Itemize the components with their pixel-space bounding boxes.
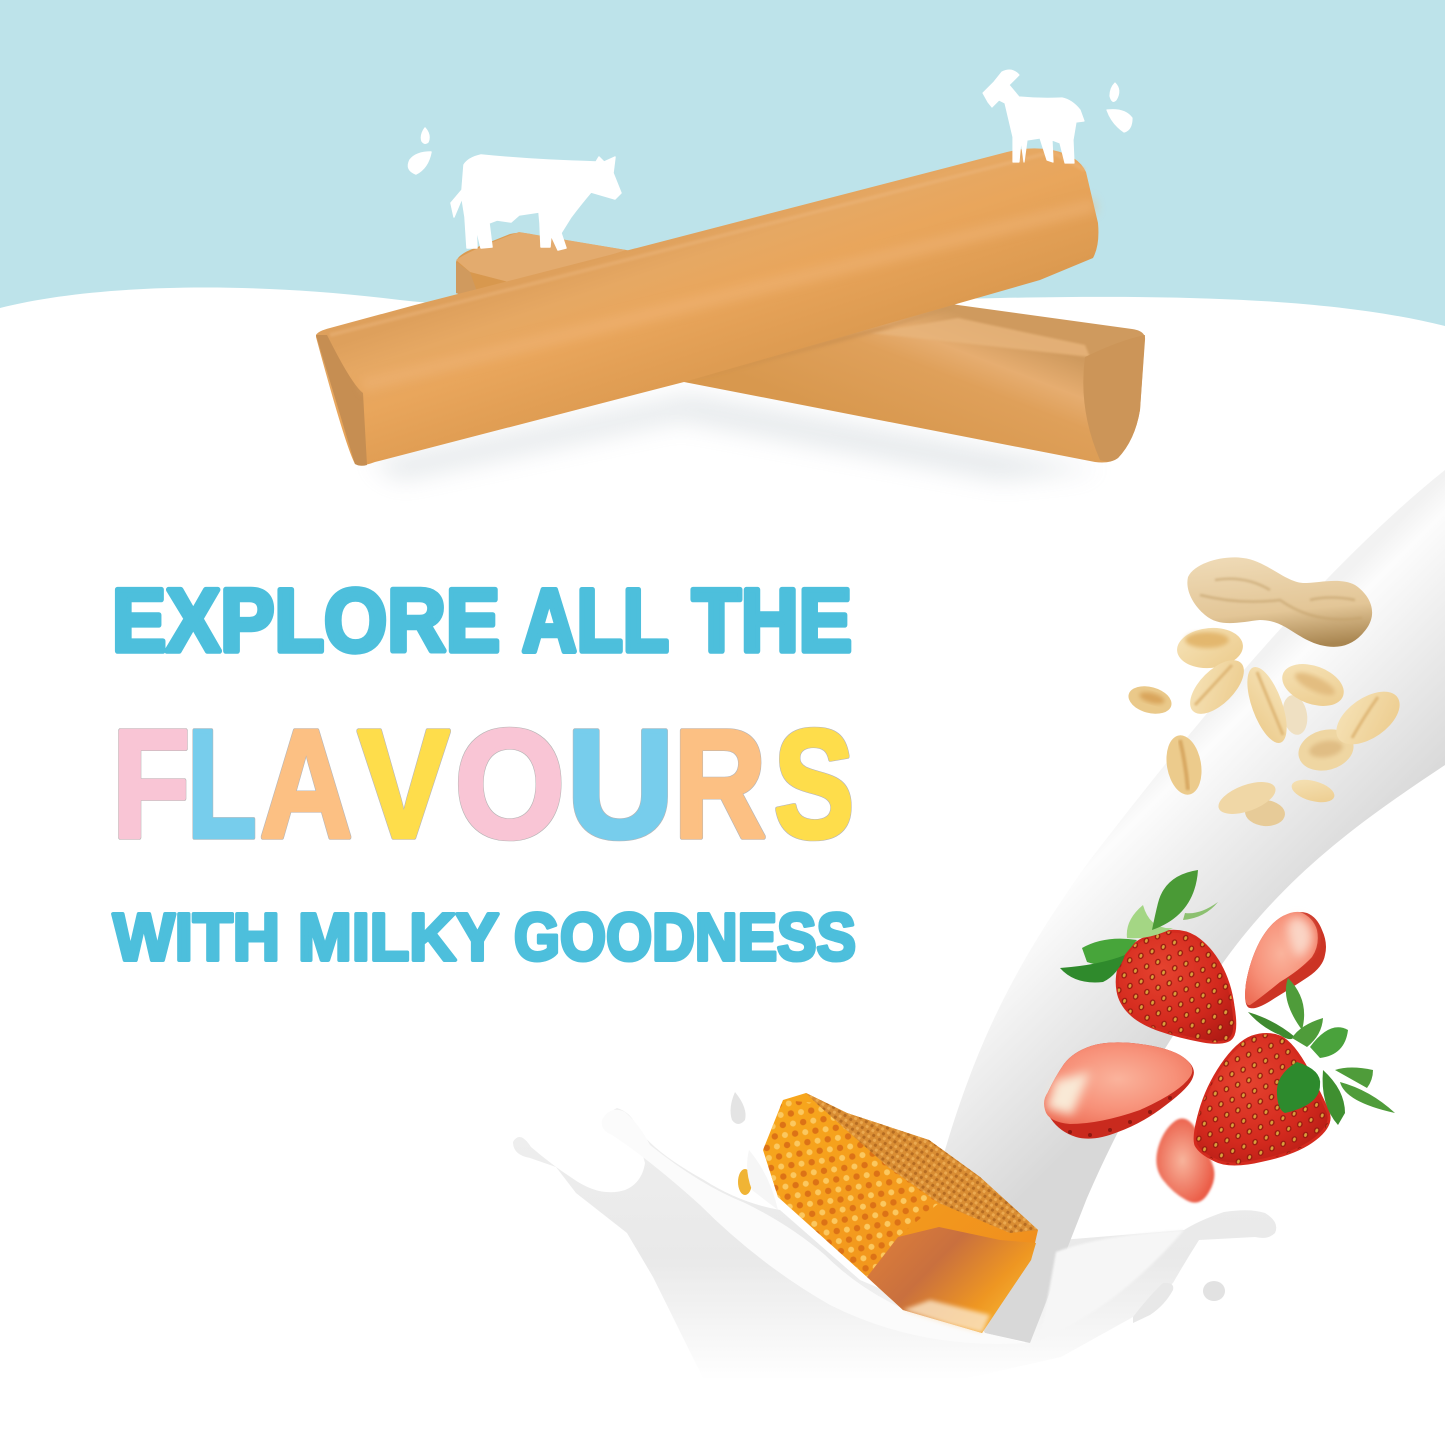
heading: flavours multicoloured: V — [358, 698, 449, 870]
whole strawberry right — [1195, 978, 1395, 1164]
heading: flavours multicoloured — [112, 697, 854, 870]
icon: goat with milk drops — [983, 70, 1132, 163]
heading: flavours multicoloured: U — [566, 699, 674, 870]
strawberry slice top right — [1245, 912, 1326, 1008]
splash right lobe highlight — [1040, 1230, 1184, 1340]
heading: flavours multicoloured: O — [455, 699, 565, 870]
heading: flavours multicoloured: S — [774, 699, 854, 870]
heading: explore all the: THE — [692, 570, 852, 670]
honey amber face — [867, 1227, 1036, 1333]
subheading: with milky goodness: GOODNESS — [514, 900, 856, 975]
heading: flavours multicoloured: R — [674, 698, 766, 870]
whole strawberry left — [1060, 870, 1235, 1042]
heading: explore all the: EXPLORE — [112, 570, 500, 670]
heading: flavours multicoloured: L — [187, 697, 257, 870]
milk stream — [900, 470, 1445, 1343]
peanut halves — [1125, 625, 1409, 828]
subheading: with milky goodness — [113, 900, 856, 975]
heading: flavours multicoloured: A — [260, 698, 352, 870]
subheading: with milky goodness: WITH — [113, 900, 280, 975]
small blurred strawberry piece — [1156, 1119, 1214, 1203]
ingredient: strawberries — [1044, 870, 1395, 1203]
heading: explore all the: ALL — [522, 570, 669, 670]
heading: explore all the — [112, 570, 852, 670]
ingredient: honeycomb — [763, 1093, 1038, 1333]
ingredient: peanuts — [1125, 557, 1409, 828]
honeycomb cell face — [763, 1100, 939, 1277]
heading: flavours multicoloured: F — [112, 698, 190, 870]
strawberry slice left — [1044, 1042, 1194, 1139]
product: crossed chew sticks — [316, 148, 1145, 480]
front chew stick — [316, 148, 1098, 466]
subheading: with milky goodness: MILKY — [298, 900, 499, 975]
back chew stick — [456, 232, 1145, 462]
whole peanut — [1187, 557, 1372, 647]
milk splash — [513, 1108, 1276, 1380]
icon: cow with milk drops — [408, 128, 621, 250]
sky background — [0, 0, 1445, 345]
milk droplets — [731, 1092, 746, 1124]
milk stream and splash — [513, 470, 1445, 1380]
milk wave crest — [602, 1110, 1025, 1344]
honeycomb top crust — [806, 1093, 1038, 1233]
